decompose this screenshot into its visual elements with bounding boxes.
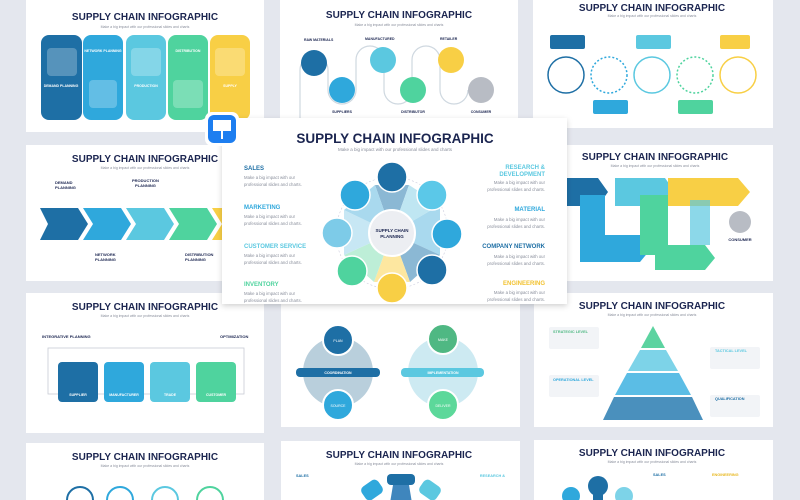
slide: middle-left chevrons: SUPPLY CHAIN INFOGRAPHIC [72, 154, 218, 165]
slide: bottom-left cards: INTEGRATIVE PLANNING [42, 334, 91, 339]
slide: bottom-right pyramid: Make a big impact with our professional slides and charts [608, 313, 697, 317]
slide: middle-right arrows: CONSUMER [728, 237, 752, 242]
slide: middle-right arrows: SUPPLY CHAIN INFOGRAPHIC [582, 152, 728, 163]
slide: top-middle stations [280, 0, 518, 130]
featured slide: center: Make a big impact with our [244, 214, 296, 219]
slide: middle-left chevrons: PLANNING [185, 257, 206, 262]
slide: middle-left chevrons: PLANNING [55, 185, 76, 190]
row 4 slides: ENGINEERING [712, 473, 739, 477]
row 4 slides: Make a big impact with our professional slides and charts [355, 462, 444, 466]
slide: bottom-middle coordination: COORDINATION [324, 371, 352, 375]
featured slide: center: Make a big impact with our [494, 290, 546, 295]
slide: middle-left chevrons: Make a big impact with our professional slides and charts [101, 166, 190, 170]
row 4 slides: SUPPLY CHAIN INFOGRAPHIC [579, 448, 725, 459]
featured slide: center: professional slides and charts. [244, 221, 302, 226]
slide: bottom-right pyramid: SUPPLY CHAIN INFOGRAPHIC [579, 301, 725, 312]
featured slide: center: professional slides and charts. [487, 224, 545, 229]
featured slide: center: Make a big impact with our professional slides and charts [338, 147, 453, 152]
title: SUPPLY CHAIN INFOGRAPHIC [296, 131, 494, 146]
slide: top-right rings [533, 0, 773, 128]
row 4 slides: SALES [296, 474, 309, 478]
slide: top-middle stations: RAW MATERIALS [304, 38, 334, 42]
slide: bottom-right pyramid: TACTICAL LEVEL [715, 349, 748, 353]
right labels: COMPANY NETWORK [482, 244, 546, 250]
slide: middle-left chevrons: DEMAND [55, 180, 73, 185]
featured slide: center [222, 118, 567, 304]
wheel: PLANNING [380, 234, 404, 239]
wheel [322, 162, 462, 303]
featured slide: center: professional slides and charts. [244, 298, 302, 303]
slide: top-left cards: DISTRIBUTION [176, 49, 201, 53]
slide: bottom-left cards: MANUFACTURER [109, 393, 139, 397]
row 4 slides: SUPPLY CHAIN INFOGRAPHIC [326, 450, 472, 461]
slide: bottom-middle coordination: SOURCE [331, 404, 346, 408]
left labels: CUSTOMER SERVICE [244, 244, 306, 250]
slide: bottom-right pyramid: STRATEGIC LEVEL [553, 330, 589, 334]
slide: middle-left chevrons: PLANNING [95, 257, 116, 262]
row 4 slides: RESEARCH & [480, 474, 505, 478]
featured slide: center: Make a big impact with our [244, 253, 296, 258]
slide: bottom-right pyramid: QUALIFICATION [715, 397, 745, 401]
featured slide: center: Make a big impact with our [244, 291, 296, 296]
slide: middle-left chevrons [26, 145, 264, 281]
slide: bottom-left cards: OPTIMIZATION [220, 334, 248, 339]
featured slide: center: Make a big impact with our [494, 217, 546, 222]
right labels [482, 165, 546, 287]
slide: middle-left chevrons: DISTRIBUTION [185, 252, 214, 257]
slide: top-middle stations: RETAILER [440, 37, 458, 41]
right labels: ENGINEERING [503, 281, 545, 287]
featured slide: center: professional slides and charts. [244, 260, 302, 265]
slide: top-left cards: Make a big impact with our professional slides and charts [101, 25, 190, 29]
row 4 slides: SALES [653, 473, 666, 477]
slide: top-middle stations: DISTRIBUTOR [401, 110, 425, 114]
slide: middle-left chevrons: PLANNING [135, 183, 156, 188]
slide: middle-left chevrons: NETWORK [95, 252, 116, 257]
slide: top-left cards [26, 0, 264, 132]
wheel: SUPPLY CHAIN [375, 228, 409, 233]
featured slide: center: Make a big impact with our [494, 254, 546, 259]
slide: bottom-middle coordination: MAKE [438, 338, 449, 342]
slide: top-middle stations: CONSUMER [471, 110, 492, 114]
slide: middle-left chevrons: PRODUCTION [132, 178, 159, 183]
slide: bottom-right pyramid: OPERATIONAL LEVEL [553, 378, 594, 382]
row 4 slides: Make a big impact with our professional slides and charts [101, 464, 190, 468]
left labels: INVENTORY [244, 282, 279, 288]
slide: top-middle stations: MANUFACTURED [365, 37, 395, 41]
featured slide: center: professional slides and charts. [487, 297, 545, 302]
slide: bottom-left cards: TRADE [164, 393, 177, 397]
slide: top-left cards: SUPPLY CHAIN INFOGRAPHIC [72, 12, 218, 23]
left labels: SALES [244, 166, 264, 172]
featured slide: center: professional slides and charts. [244, 182, 302, 187]
row 4 slides: SUPPLY CHAIN INFOGRAPHIC [72, 452, 218, 463]
slide: top-middle stations: Make a big impact with our professional slides and charts [355, 23, 444, 27]
featured slide: center: professional slides and charts. [487, 261, 545, 266]
slide: bottom-left cards: Make a big impact with our professional slides and charts [101, 314, 190, 318]
slide: top-middle stations: SUPPLIERS [332, 110, 353, 114]
slide: bottom-left cards [26, 293, 264, 433]
row 4 slides [26, 440, 773, 500]
left labels: MARKETING [244, 205, 281, 211]
slide: bottom-left cards: SUPPLY CHAIN INFOGRAPHIC [72, 302, 218, 313]
slide: top-left cards: PRODUCTION [134, 84, 158, 88]
slide: bottom-middle coordination [281, 293, 520, 427]
icon: keynote [205, 112, 239, 146]
slide: bottom-middle coordination: DELIVER [436, 404, 451, 408]
slide: top-middle stations: SUPPLY CHAIN INFOGRAPHIC [326, 10, 472, 21]
slide: bottom-middle coordination: IMPLEMENTATION [428, 371, 459, 375]
slide: top-left cards: NETWORK PLANNING [84, 49, 122, 53]
featured slide: center: Make a big impact with our [244, 175, 296, 180]
right labels: RESEARCH & [505, 165, 546, 171]
right labels: MATERIAL [514, 207, 545, 213]
slide: bottom-middle coordination: PLAN [333, 339, 343, 343]
slide: top-right rings: SUPPLY CHAIN INFOGRAPHIC [579, 3, 725, 14]
right labels: DEVELOPMENT [499, 172, 545, 178]
slide: bottom-right pyramid [534, 293, 773, 427]
slide: top-right rings: Make a big impact with our professional slides and charts [608, 14, 697, 18]
slide: bottom-left cards: SUPPLIER [69, 393, 87, 397]
slide: middle-right arrows: Make a big impact with our professional slides and charts [611, 164, 700, 168]
row 4 slides: Make a big impact with our professional slides and charts [608, 460, 697, 464]
left labels [244, 166, 306, 288]
featured slide: center: Make a big impact with our [494, 180, 546, 185]
slide: bottom-left cards: CUSTOMER [206, 393, 226, 397]
slide: middle-right arrows [533, 145, 773, 281]
slide: top-left cards: DEMAND PLANNING [44, 84, 79, 88]
featured slide: center: professional slides and charts. [487, 187, 545, 192]
slide: top-left cards: SUPPLY [223, 84, 238, 88]
